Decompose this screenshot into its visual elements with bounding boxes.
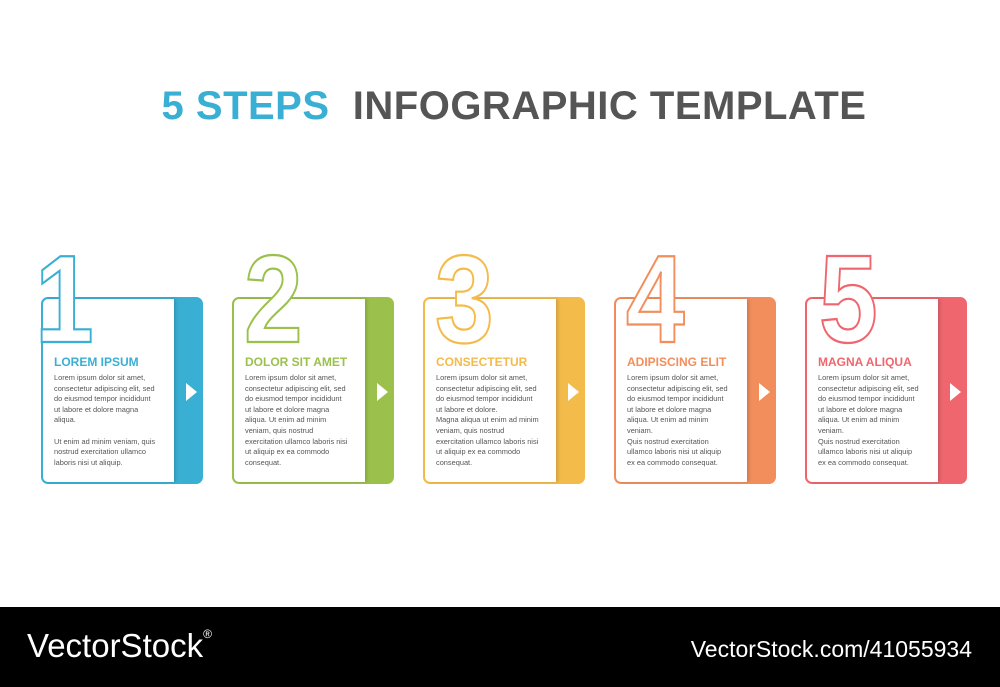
- heading 2: DOLOR SIT AMET: [245, 355, 347, 369]
- text 4: [627, 373, 728, 467]
- text 2: exercitation ullamco laboris nisi: [245, 437, 347, 446]
- card 1: [35, 231, 203, 484]
- number 2: 2: [244, 231, 303, 369]
- text 3: [436, 373, 539, 467]
- text 5: ullamco laboris nisi ut aliquip: [818, 447, 912, 456]
- text 3: consectetur adipiscing elit, sed: [436, 384, 537, 393]
- text 1: Ut enim ad minim veniam, quis: [54, 437, 155, 446]
- text 2: consequat.: [245, 458, 281, 467]
- text 5: [818, 373, 919, 467]
- text 3: ut aliquip ex ea commodo: [436, 447, 520, 456]
- text 2: do eiusmod tempor incididunt: [245, 394, 342, 403]
- text 2: ut labore et dolore magna: [245, 405, 329, 414]
- heading 5: MAGNA ALIQUA: [818, 355, 912, 369]
- footer bar: [0, 607, 1000, 687]
- text 1: [54, 373, 155, 467]
- text 5: ex ea commodo consequat.: [818, 458, 909, 467]
- title: 5 STEPS INFOGRAPHIC TEMPLATE: [162, 84, 866, 128]
- text 3: exercitation ullamco laboris nisi: [436, 437, 538, 446]
- text 4: consectetur adipiscing elit, sed: [627, 384, 728, 393]
- text 5: consectetur adipiscing elit, sed: [818, 384, 919, 393]
- text 1: nostrud exercitation ullamco: [54, 447, 146, 456]
- heading 4: ADIPISCING ELIT: [627, 355, 726, 369]
- number 3: 3: [435, 231, 494, 369]
- footer logo: VectorStock®: [27, 627, 212, 664]
- text 1: ut labore et dolore magna: [54, 405, 138, 414]
- text 4: veniam.: [627, 426, 653, 435]
- heading 1: LOREM IPSUM: [54, 355, 139, 369]
- text 4: Lorem ipsum dolor sit amet,: [627, 373, 718, 382]
- text 3: consequat.: [436, 458, 472, 467]
- text 3: do eiusmod tempor incididunt: [436, 394, 533, 403]
- text 1: Lorem ipsum dolor sit amet,: [54, 373, 145, 382]
- text 5: Quis nostrud exercitation: [818, 437, 900, 446]
- card 4: [614, 231, 776, 484]
- text 2: consectetur adipiscing elit, sed: [245, 384, 346, 393]
- text 5: aliqua. Ut enim ad minim: [818, 415, 899, 424]
- text 4: ut labore et dolore magna: [627, 405, 711, 414]
- text 2: Lorem ipsum dolor sit amet,: [245, 373, 336, 382]
- text 1: laboris nisi ut aliquip.: [54, 458, 123, 467]
- text 2: [245, 373, 347, 467]
- footer url: VectorStock.com/41055934: [691, 636, 972, 662]
- text 4: ex ea commodo consequat.: [627, 458, 718, 467]
- text 1: do eiusmod tempor incididunt: [54, 394, 151, 403]
- number 4: 4: [626, 231, 685, 369]
- text 3: Lorem ipsum dolor sit amet,: [436, 373, 527, 382]
- text 5: do eiusmod tempor incididunt: [818, 394, 915, 403]
- text 5: ut labore et dolore magna: [818, 405, 902, 414]
- card 3: [423, 231, 585, 484]
- card 2: [232, 231, 394, 484]
- text 2: aliqua. Ut enim ad minim: [245, 415, 326, 424]
- text 2: ut aliquip ex ea commodo: [245, 447, 329, 456]
- text 5: Lorem ipsum dolor sit amet,: [818, 373, 909, 382]
- heading 3: CONSECTETUR: [436, 355, 527, 369]
- text 2: veniam, quis nostrud: [245, 426, 313, 435]
- text 1: consectetur adipiscing elit, sed: [54, 384, 155, 393]
- text 4: Quis nostrud exercitation: [627, 437, 709, 446]
- text 5: veniam.: [818, 426, 844, 435]
- text 3: veniam, quis nostrud: [436, 426, 504, 435]
- text 4: aliqua. Ut enim ad minim: [627, 415, 708, 424]
- text 4: ullamco laboris nisi ut aliquip: [627, 447, 721, 456]
- text 1: aliqua.: [54, 415, 76, 424]
- number 5: 5: [819, 231, 878, 369]
- text 3: ut labore et dolore.: [436, 405, 498, 414]
- number 1: 1: [35, 231, 94, 369]
- card 5: [805, 231, 967, 484]
- text 3: Magna aliqua ut enim ad minim: [436, 415, 539, 424]
- text 4: do eiusmod tempor incididunt: [627, 394, 724, 403]
